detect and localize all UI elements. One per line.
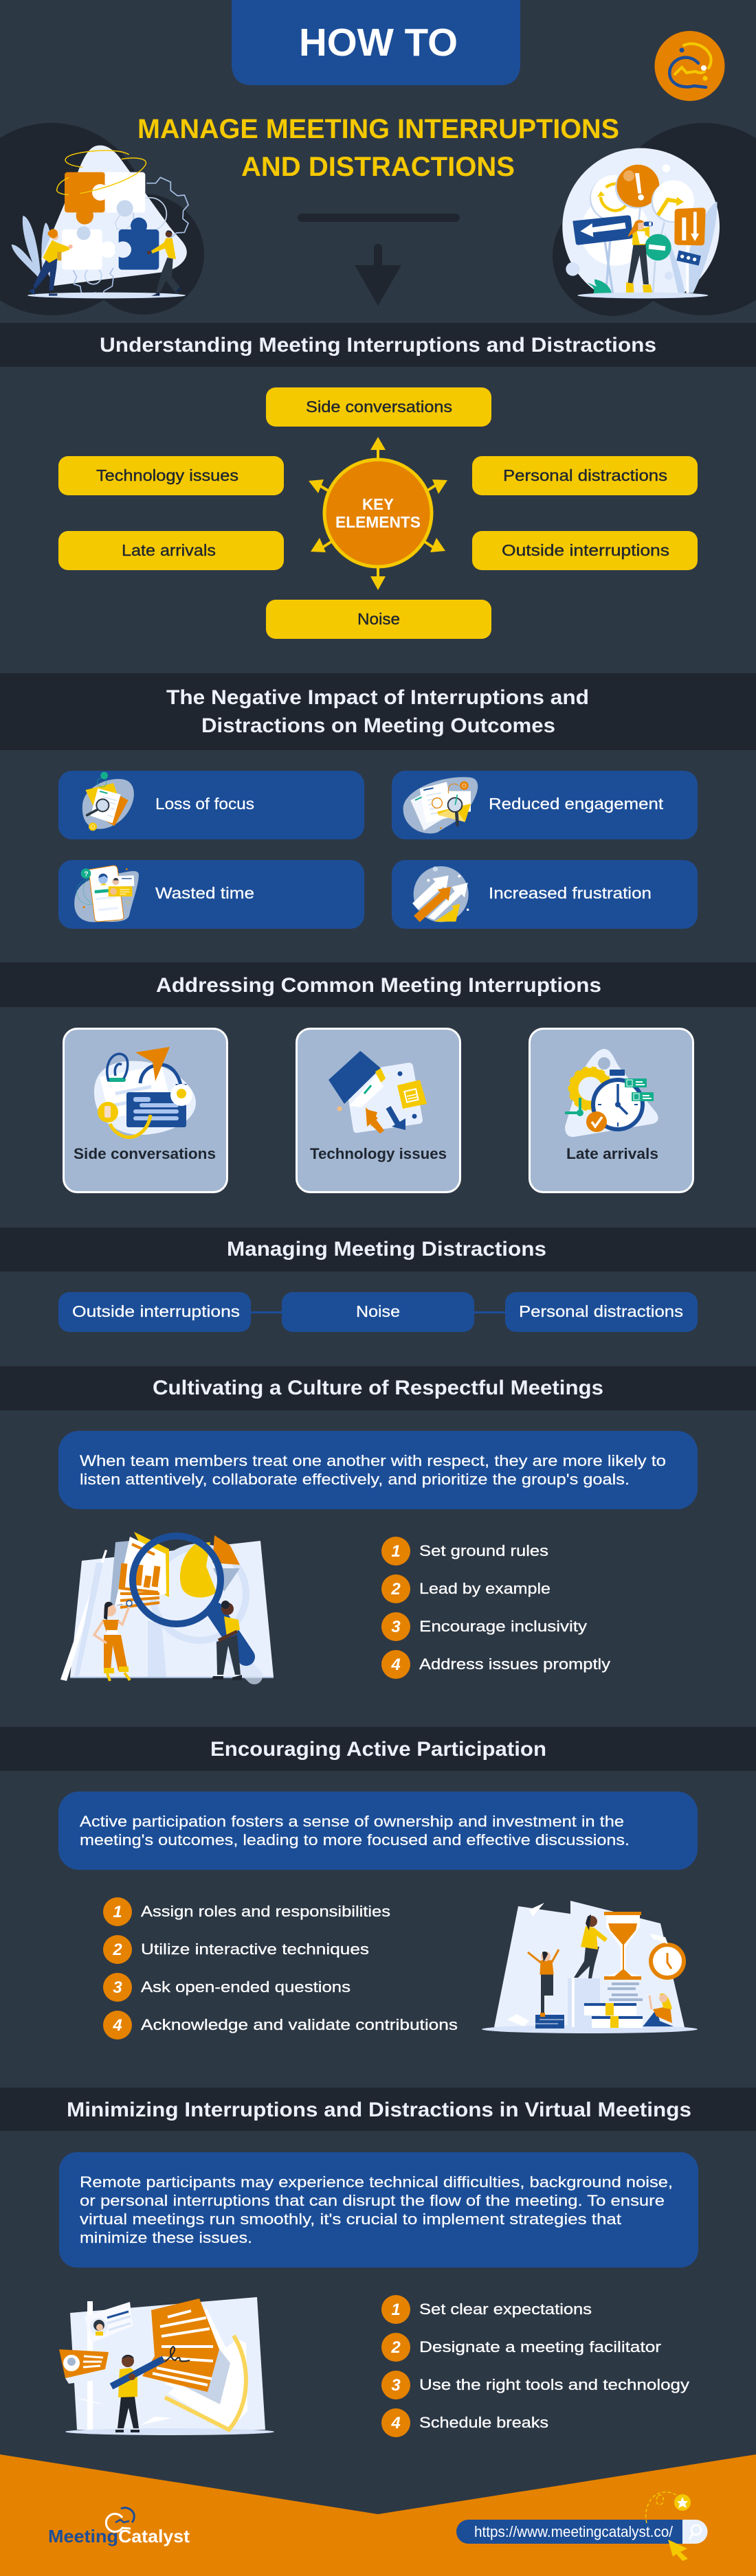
- callout text block: listen attentively, collaborate effectively, and prioritize the group's goals.: [80, 1471, 630, 1488]
- icon: stopwatch and gear: [565, 1049, 658, 1137]
- item 1: [381, 1537, 548, 1566]
- item 4: 4: [390, 1656, 401, 1674]
- divider bar and down arrow: [298, 214, 460, 306]
- section heading bar: Addressing Common Meeting Interruptions: [156, 974, 601, 997]
- callout text block: Remote participants may experience technical difficulties, background noise,: [80, 2173, 673, 2191]
- callout text block: meeting's outcomes, leading to more focused and effective discussions.: [80, 1831, 630, 1849]
- box: noise: Noise: [356, 1302, 400, 1320]
- box: outside interruptions: [58, 1292, 251, 1332]
- panel: negative impact section: [0, 673, 756, 929]
- item 1: [103, 1897, 390, 1926]
- section heading bar: [0, 1727, 756, 1771]
- card: side conversations: [63, 1029, 227, 1193]
- illustration: man signing document: [59, 2297, 274, 2435]
- section heading bar: Cultivating a Culture of Respectful Meetings: [153, 1377, 603, 1399]
- section heading bar: [0, 2088, 756, 2131]
- card: wasted time: Wasted time: [155, 884, 254, 902]
- item 2: 2: [390, 1580, 401, 1598]
- illustration: team with hourglass: [482, 1901, 698, 2033]
- box: noise: [282, 1292, 474, 1332]
- box: personal distractions: Personal distractions: [519, 1302, 683, 1320]
- icon: rising arrows: [412, 866, 469, 922]
- illustration: woman with binoculars among signs: [553, 123, 756, 316]
- illustration: magnifier over charts: [60, 1532, 274, 1681]
- item 1: Assign roles and responsibilities: [141, 1903, 390, 1920]
- main title: AND DISTRACTIONS: [241, 152, 515, 182]
- card: late arrivals: Late arrivals: [566, 1145, 658, 1162]
- callout text block: or personal interruptions that can disrupt the flow of the meeting. To ensure: [80, 2192, 665, 2209]
- connector lines: [247, 1311, 509, 1313]
- icon: phone with profiles: ?: [84, 871, 88, 879]
- item 2: [381, 1574, 551, 1603]
- callout text block: minimize these issues.: [80, 2229, 252, 2246]
- item 3: [381, 1612, 588, 1641]
- item 1: Set clear expectations: [419, 2301, 592, 2318]
- item 2: Designate a meeting facilitator: [419, 2338, 662, 2355]
- icon: brand logo badge: [654, 31, 724, 101]
- panel: managing distractions section: [0, 1228, 756, 1332]
- item 4: [381, 1650, 611, 1679]
- item 3: [381, 2371, 690, 2399]
- item 1: [381, 2295, 592, 2324]
- item 4: 4: [390, 2414, 401, 2432]
- box: technology issues: [58, 456, 284, 495]
- section heading bar: Encouraging Active Participation: [210, 1738, 546, 1761]
- panel: footer: [0, 2454, 756, 2576]
- icon: phone with profiles: [74, 866, 139, 922]
- panel: encouraging active participation section: [0, 1727, 756, 2040]
- item 4: Acknowledge and validate contributions: [141, 2016, 458, 2033]
- box: outside interruptions: Outside interruptions: [502, 541, 669, 559]
- box: outside interruptions: [472, 531, 698, 570]
- item 3: Ask open-ended questions: [141, 1978, 351, 1996]
- item 4: Schedule breaks: [419, 2414, 548, 2431]
- card: reduced engagement: [392, 771, 698, 839]
- card: late arrivals: [529, 1029, 693, 1193]
- title tab: how to: HOW TO: [299, 21, 458, 65]
- section heading bar: Understanding Meeting Interruptions and Distractions: [100, 334, 656, 357]
- item 3: 3: [113, 1978, 122, 1997]
- card: side conversations: Side conversations: [74, 1145, 216, 1162]
- section heading bar: [0, 962, 756, 1007]
- hub: key elements: KEY: [362, 495, 394, 513]
- card: loss of focus: Loss of focus: [155, 795, 254, 813]
- card: technology issues: Technology issues: [310, 1145, 447, 1162]
- item 2: [103, 1935, 369, 1964]
- section heading bar: [0, 1228, 756, 1272]
- panel: virtual meetings section: [0, 2088, 756, 2437]
- item 2: Lead by example: [419, 1580, 551, 1597]
- panel: addressing common interruptions section: [0, 962, 756, 1193]
- icon: cursor arrow: [668, 2540, 688, 2561]
- callout text block: [58, 1792, 698, 1870]
- box: outside interruptions: Outside interruptions: [72, 1302, 240, 1320]
- box: personal distractions: Personal distractions: [503, 466, 667, 484]
- hub: key elements: [324, 460, 432, 567]
- callout text block: [58, 1431, 698, 1509]
- section heading bar: [0, 673, 756, 750]
- title tab: how to: [232, 0, 520, 85]
- item 2: 2: [112, 1941, 122, 1959]
- icon: search glass: [689, 2525, 701, 2539]
- section heading bar: [0, 323, 756, 367]
- illustration: team assembling puzzle: [0, 123, 204, 315]
- section heading bar: Managing Meeting Distractions: [227, 1238, 546, 1261]
- footer chevron background: [0, 2454, 756, 2576]
- box: technology issues: Technology issues: [96, 466, 238, 484]
- icon: folder and floppy: [329, 1051, 427, 1133]
- item 3: 3: [391, 2376, 401, 2395]
- item 3: Use the right tools and technology: [419, 2376, 690, 2393]
- brand logo: Catalyst: [118, 2526, 190, 2546]
- item 3: 3: [391, 1618, 401, 1636]
- item 4: [103, 2011, 458, 2040]
- box: side conversations: Side conversations: [306, 398, 452, 416]
- callout text block: [59, 2152, 698, 2268]
- card: wasted time: [58, 860, 364, 929]
- item 1: 1: [113, 1903, 122, 1921]
- box: personal distractions: [505, 1292, 698, 1332]
- item 3: [103, 1973, 351, 2002]
- card: increased frustration: Increased frustration: [489, 884, 652, 902]
- box: personal distractions: [472, 456, 698, 495]
- item 3: Encourage inclusivity: [419, 1618, 588, 1635]
- item 4: 4: [112, 2016, 122, 2035]
- panel: culture of respectful meetings section: [0, 1366, 756, 1681]
- hub: key elements: ELEMENTS: [335, 513, 421, 531]
- icon: document and magnifier: [82, 772, 134, 831]
- section heading bar: [0, 1366, 756, 1410]
- website url bar: [456, 2520, 708, 2561]
- item 4: [381, 2408, 548, 2437]
- website url bar: https://www.meetingcatalyst.co/: [474, 2523, 674, 2540]
- box: late arrivals: Late arrivals: [122, 541, 216, 559]
- section heading bar: Distractions on Meeting Outcomes: [201, 714, 555, 737]
- callout text block: When team members treat one another with respect, they are more likely to: [80, 1452, 666, 1469]
- main title: [137, 114, 619, 182]
- section heading bar: The Negative Impact of Interruptions and: [166, 686, 589, 709]
- item 4: Address issues promptly: [419, 1656, 611, 1673]
- section heading bar: Minimizing Interruptions and Distractions in Virtual Meetings: [67, 2099, 691, 2121]
- numbered list: [381, 1537, 611, 1679]
- callout text block: Active participation fosters a sense of ownership and investment in the: [80, 1813, 624, 1830]
- box: late arrivals: [58, 531, 284, 570]
- item 1: 1: [391, 2301, 401, 2319]
- item 1: 1: [391, 1542, 401, 1561]
- icon: message and paper plane: [94, 1047, 196, 1137]
- card: increased frustration: [392, 860, 698, 929]
- panel: understanding section: [0, 323, 756, 639]
- numbered list: [381, 2295, 690, 2437]
- box: noise: Noise: [357, 610, 400, 628]
- item 2: Utilize interactive techniques: [141, 1941, 369, 1958]
- icon: star badge with dashed trail: [646, 2492, 691, 2523]
- icon: envelope and documents: [403, 777, 478, 833]
- card: technology issues: [297, 1029, 460, 1193]
- numbered list: [103, 1897, 458, 2040]
- arrows radiating from hub: [309, 437, 447, 590]
- item 1: Set ground rules: [419, 1542, 548, 1559]
- card: reduced engagement: Reduced engagement: [489, 795, 664, 813]
- item 2: 2: [390, 2338, 401, 2357]
- main title: MANAGE MEETING INTERRUPTIONS: [137, 114, 619, 144]
- item 2: [381, 2333, 662, 2362]
- box: noise: [266, 600, 491, 639]
- brand logo: [48, 2508, 190, 2546]
- box: side conversations: [266, 387, 491, 427]
- panel: header: [0, 0, 756, 316]
- callout text block: virtual meetings run smoothly, it's crucial to implement strategies that: [80, 2211, 622, 2228]
- brand logo: Meeting: [48, 2526, 118, 2546]
- card: loss of focus: [58, 771, 364, 839]
